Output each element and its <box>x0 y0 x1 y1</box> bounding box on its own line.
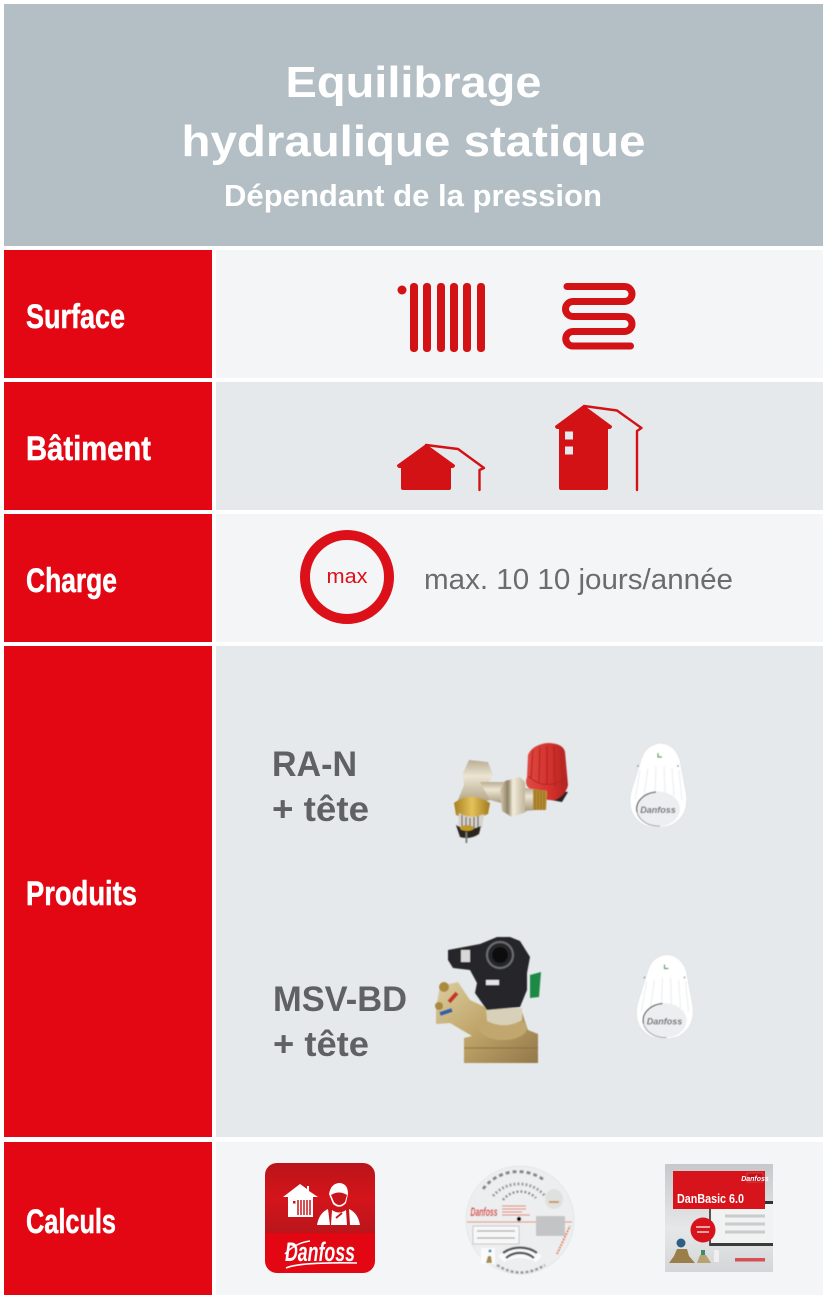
header panel <box>4 4 823 246</box>
icon: small house <box>397 444 484 490</box>
row: Produits <box>4 646 823 1137</box>
photo: RA-N valve with red cap <box>454 743 568 843</box>
row: Calculs <box>4 1142 823 1295</box>
title <box>182 58 646 166</box>
icon: calculation wheel <box>466 1166 574 1274</box>
label: Bâtiment: Bâtiment <box>26 430 151 468</box>
photo: thermostatic head 2: Danfoss <box>647 1016 682 1026</box>
photo: thermostatic head 2 <box>636 954 693 1039</box>
icon: DanBasic 6.0 cover: DanBasic 6.0 <box>677 1191 744 1206</box>
icon: radiator <box>398 283 485 352</box>
product label: RA-N <box>272 745 369 829</box>
product label: MSV-BD: + tête <box>273 1025 369 1064</box>
product label: MSV-BD: MSV-BD <box>273 980 407 1019</box>
icon: Danfoss app <box>265 1163 375 1273</box>
label: Produits: Produits <box>26 875 137 913</box>
photo: thermostatic head 1: Danfoss <box>640 805 676 815</box>
title: Equilibrage <box>286 58 542 107</box>
photo: thermostatic head 1 <box>630 743 687 828</box>
load text: max. 10 10 jours/année <box>424 564 733 596</box>
label: Charge: Charge <box>26 562 117 600</box>
icon: underfloor heating <box>566 286 632 346</box>
row: Surface <box>4 250 823 378</box>
product label: RA-N: + tête <box>272 790 369 829</box>
product label: MSV-BD <box>273 980 407 1064</box>
subtitle: Dépendant de la pression <box>224 178 602 213</box>
icon: tall house <box>555 405 642 490</box>
icon: DanBasic 6.0 cover <box>665 1164 773 1272</box>
icon: Danfoss app: Danfoss <box>285 1237 355 1267</box>
row: Bâtiment <box>4 382 823 510</box>
product label: RA-N: RA-N <box>272 745 357 784</box>
icon: DanBasic 6.0 cover: Danfoss <box>741 1176 769 1183</box>
icon: calculation wheel: Danfoss <box>470 1205 498 1219</box>
photo: MSV-BD valve <box>435 937 541 1063</box>
label: Surface: Surface <box>26 298 125 336</box>
label: Calculs: Calculs <box>26 1203 116 1241</box>
title: hydraulique statique <box>182 117 646 166</box>
icon: max ring: max <box>326 566 368 588</box>
row: Charge <box>4 514 823 642</box>
icon: max ring <box>305 535 389 619</box>
